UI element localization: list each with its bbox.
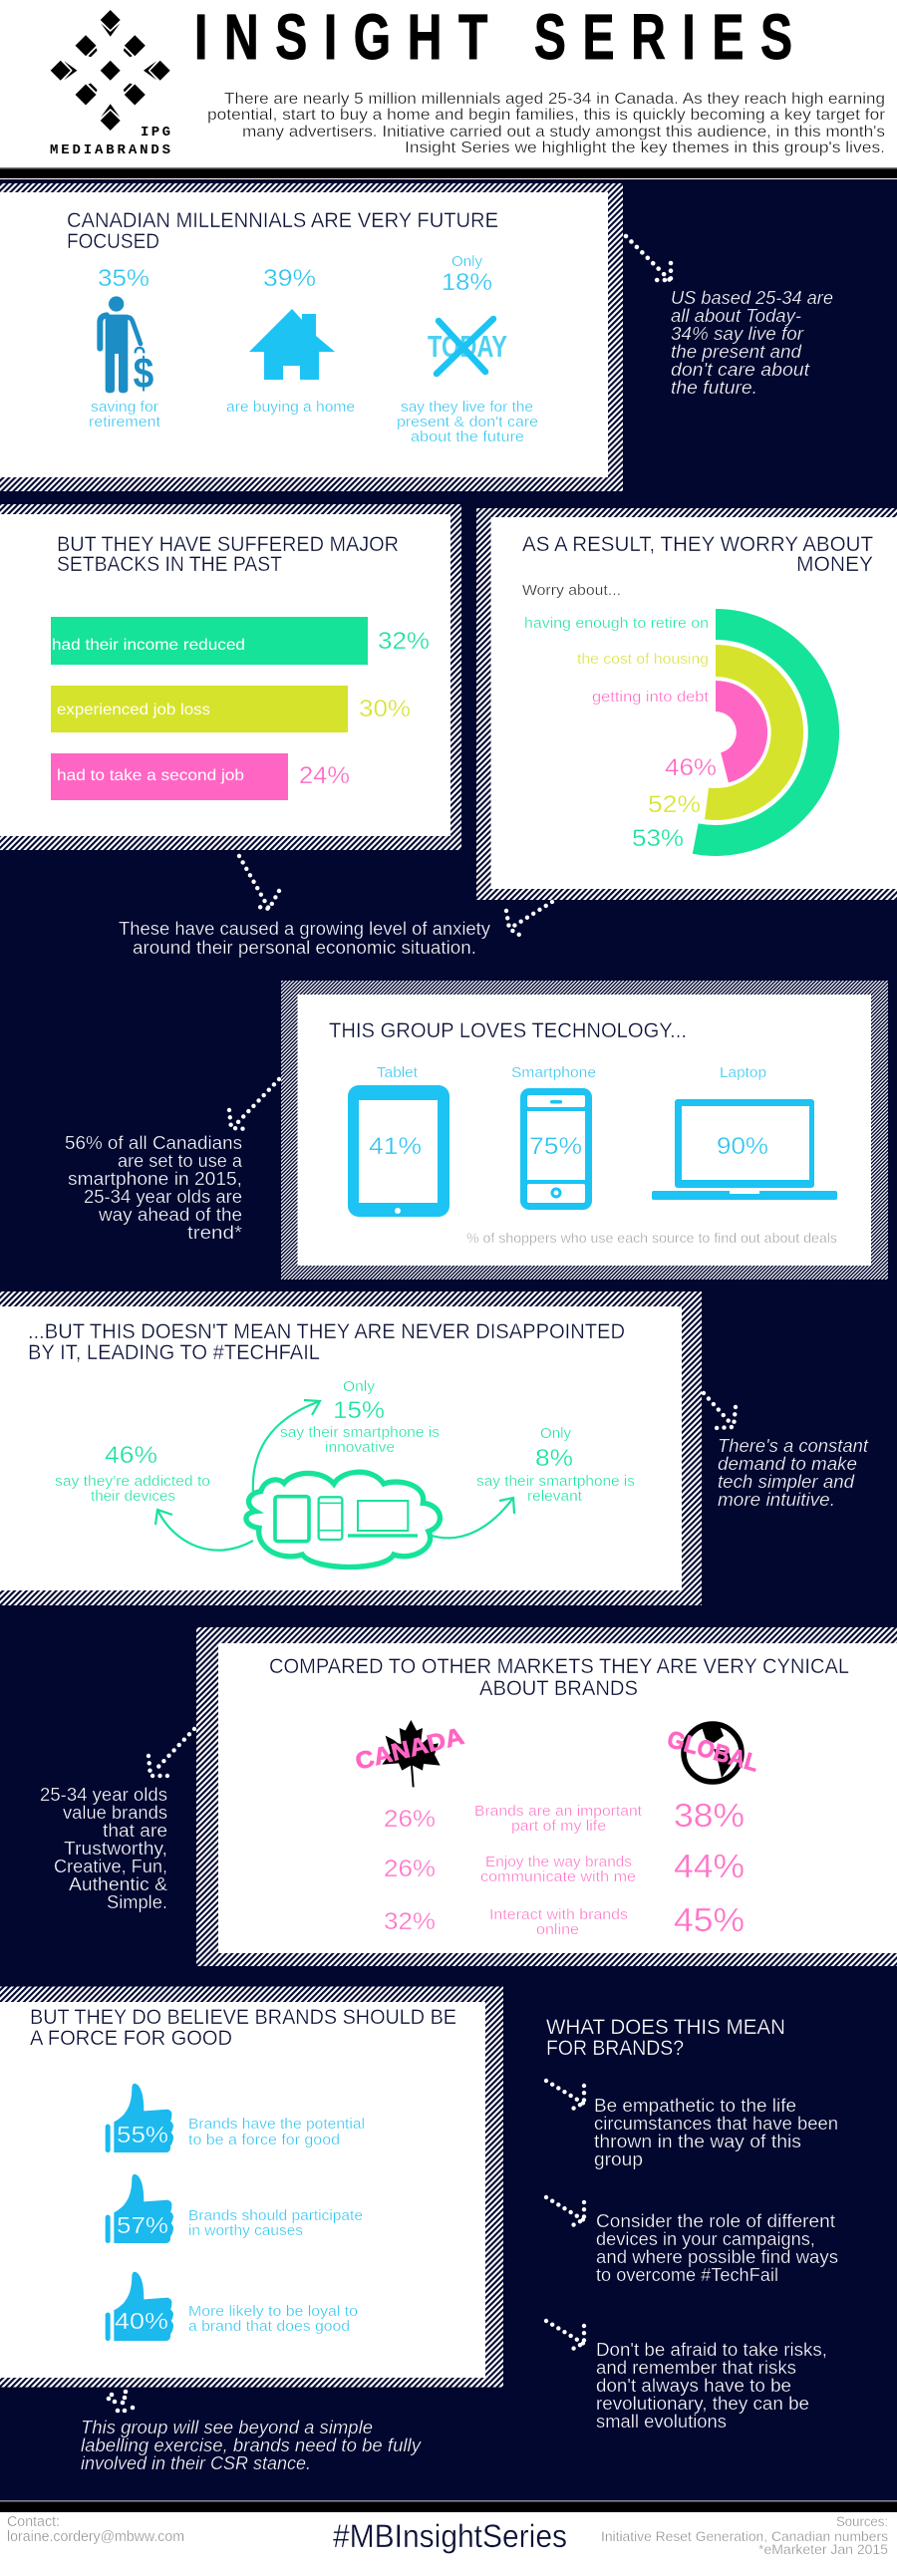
stat: only 15% innovative: [280, 1378, 440, 1456]
icon: person with dollar: $: [134, 351, 153, 399]
bar chart: setbacks: had to take a second job: [57, 767, 244, 784]
heading: techfail: [28, 1320, 625, 1364]
callout: smartphone use: smartphone in 2015,: [68, 1169, 242, 1189]
panel: loves technology: [281, 981, 888, 1280]
comparison table: Canada vs Global: part of my life: [511, 1818, 606, 1835]
intro paragraph: Insight Series we highlight the key themes in this group's lives.: [405, 140, 885, 156]
heading: techfail: BY IT, LEADING TO #TECHFAIL: [28, 1341, 320, 1364]
header: [0, 0, 897, 179]
stat: only 8% relevant: relevant: [527, 1488, 583, 1505]
callout: smartphone use: are set to use a: [118, 1151, 243, 1171]
heading: future focused: [67, 209, 498, 253]
contact: loraine.cordery@mbww.com: [7, 2528, 184, 2545]
heading: what does this mean: WHAT DOES THIS MEAN: [546, 2016, 785, 2039]
label: loyal: a brand that does good: [188, 2318, 350, 2335]
text: point 1: Be empathetic to the life: [594, 2096, 796, 2116]
callout: US based: 34% say live for: [671, 324, 804, 344]
heading: setbacks: [57, 533, 399, 576]
intro paragraph: potential, start to buy a home and begin families, this is quickly becoming a key target for: [207, 107, 886, 124]
comparison table: Canada vs Global: 44%: [674, 1848, 745, 1884]
stat: 46% addicted: their devices: [91, 1488, 175, 1505]
text: point 3: revolutionary, they can be: [596, 2394, 809, 2414]
text: point 2: devices in your campaigns,: [596, 2229, 815, 2249]
text: point 1: [594, 2096, 838, 2169]
bar chart: setbacks: 24%: [299, 762, 350, 789]
text: point 3: and remember that risks: [596, 2358, 796, 2378]
heading: worry about money: AS A RESULT, THEY WORRY ABOUT: [522, 533, 873, 556]
heading: what does this mean: [546, 2016, 785, 2060]
logo: IPG Mediabrands: IPG: [141, 125, 170, 141]
callout: brand values: value brands: [63, 1803, 167, 1823]
sources: Initiative Reset Generation, Canadian numbers: [601, 2528, 888, 2544]
callout: brand values: [40, 1785, 167, 1912]
label: worry about: Worry about...: [522, 582, 621, 599]
callout: simpler tech: demand to make: [718, 1454, 857, 1474]
stat: only 18% live for today: say they live for the: [401, 399, 533, 416]
icon: thumb 40%: [106, 2272, 173, 2341]
label: potential: [188, 2116, 365, 2148]
radial chart: worries: having enough to retire on: [524, 615, 709, 632]
icon: thumb 40%: 40%: [115, 2308, 168, 2334]
label: potential: Brands have the potential: [188, 2116, 365, 2133]
stat: only 15% innovative: innovative: [325, 1439, 395, 1456]
callout: US based: don't care about: [671, 360, 810, 380]
callout: anxiety: [119, 919, 490, 958]
callout: smartphone use: 25-34 year olds are: [84, 1187, 242, 1207]
icon: thumb 55%: 55%: [117, 2122, 168, 2147]
callout: simpler tech: tech simpler and: [718, 1472, 855, 1492]
text: point 3: [596, 2340, 827, 2432]
arrow: to tech callout: [704, 1393, 736, 1428]
panel: setbacks: [0, 504, 461, 850]
stat: only 18% live for today: about the future: [411, 429, 524, 445]
label: loyal: [188, 2303, 358, 2335]
radial chart: worries: the cost of housing: [577, 651, 709, 668]
icon: crossed out today: TODAY: [428, 329, 507, 364]
text: point 1: group: [594, 2149, 643, 2169]
stat: only 18% live for today: [397, 253, 538, 445]
comparison table: Canada vs Global: 26%: [384, 1856, 436, 1882]
device: tablet: Tablet: [377, 1064, 419, 1081]
comparison table: Canada vs Global: Enjoy the way brands: [485, 1854, 632, 1870]
arrow: to US callout: [626, 236, 671, 280]
bar chart: setbacks: [51, 617, 430, 800]
panel: techfail: [0, 1291, 702, 1605]
callout: US based: [671, 288, 833, 398]
stat: 46% addicted: 46%: [105, 1442, 157, 1469]
label: potential: to be a force for good: [188, 2132, 340, 2148]
callout: CSR stance: involved in their CSR stance.: [81, 2453, 311, 2473]
callout: US based: the future.: [671, 378, 757, 398]
radial chart: worries: 52%: [648, 791, 701, 818]
icon: person with dollar: [100, 296, 153, 399]
stat: only 15% innovative: 15%: [333, 1397, 385, 1424]
sources: [601, 2513, 888, 2557]
heading: setbacks: SETBACKS IN THE PAST: [57, 553, 282, 576]
callout: anxiety: These have caused a growing level of anxiety: [119, 919, 490, 939]
stat: only 18% live for today: Only: [451, 253, 483, 270]
heading: worry about money: MONEY: [796, 553, 873, 576]
arrow: point 2: [546, 2197, 584, 2227]
contact: [7, 2513, 184, 2545]
comparison table: Canada vs Global: online: [536, 1921, 579, 1938]
callout: CSR stance: This group will see beyond a simple: [81, 2418, 373, 2437]
stat: only 8% relevant: [476, 1425, 635, 1505]
radial chart: worries: [524, 609, 839, 856]
callout: anxiety: around their personal economic situation.: [133, 938, 476, 958]
label: worthy causes: in worthy causes: [188, 2222, 303, 2239]
arrow: small dotted head: [107, 2390, 135, 2413]
comparison table: Canada vs Global: [384, 1797, 745, 1938]
comparison table: Canada vs Global: 26%: [384, 1806, 436, 1833]
text: point 2: and where possible find ways: [596, 2247, 838, 2267]
bar chart: setbacks: 32%: [378, 628, 430, 655]
heading: force for good: A FORCE FOR GOOD: [30, 2027, 232, 2050]
device: laptop: [652, 1064, 837, 1200]
text: point 2: to overcome #TechFail: [596, 2265, 778, 2285]
icon: crossed out today: [428, 319, 507, 374]
heading: techfail: ...BUT THIS DOESN'T MEAN THEY ARE NEVER DISAPPOINTED: [28, 1320, 625, 1343]
logo: IPG Mediabrands: [50, 10, 170, 158]
text: point 3: Don't be afraid to take risks,: [596, 2340, 827, 2360]
arrows: from cloud: [155, 1400, 514, 1551]
stat: 39% buying a home: 39%: [263, 265, 316, 292]
text: point 2: Consider the role of different: [596, 2211, 835, 2231]
callout: brand values: Trustworthy,: [64, 1839, 167, 1859]
device: laptop: 90%: [717, 1133, 768, 1160]
device: laptop: Laptop: [720, 1064, 766, 1081]
stat: only 8% relevant: Only: [540, 1425, 572, 1442]
heading: force for good: [30, 2006, 456, 2050]
contact: Contact:: [7, 2513, 60, 2530]
label: worthy causes: Brands should participate: [188, 2207, 363, 2224]
label: loyal: More likely to be loyal to: [188, 2303, 358, 2320]
arrow: to values callout: [149, 1729, 194, 1776]
icon: house: [249, 309, 335, 380]
comparison table: Canada vs Global: Brands are an important: [474, 1803, 643, 1820]
callout: smartphone use: [65, 1133, 243, 1243]
comparison table: Canada vs Global: 45%: [674, 1901, 745, 1938]
callout: simpler tech: There's a constant: [718, 1436, 869, 1456]
device: smartphone: [511, 1064, 596, 1210]
callout: simpler tech: [718, 1436, 869, 1510]
callout: brand values: that are: [103, 1821, 167, 1841]
stat: 39% buying a home: [226, 265, 355, 416]
callout: smartphone use: 56% of all Canadians: [65, 1133, 242, 1153]
arrow: point 1: [546, 2081, 584, 2111]
hashtag: #MBInsightSeries: [333, 2518, 567, 2554]
callout: US based: all about Today-: [671, 306, 801, 326]
panel: cynical about brands: [196, 1627, 897, 1966]
heading: what does this mean: FOR BRANDS?: [546, 2037, 684, 2060]
comparison table: Canada vs Global: 32%: [384, 1908, 436, 1935]
heading: force for good: BUT THEY DO BELIEVE BRANDS SHOULD BE: [30, 2006, 456, 2029]
device: tablet: 41%: [369, 1133, 422, 1160]
bar chart: setbacks: had their income reduced: [52, 637, 245, 654]
callout: US based: the present and: [671, 342, 802, 362]
stat: only 8% relevant: 8%: [535, 1445, 573, 1472]
device: smartphone: 75%: [529, 1133, 582, 1160]
stat: 46% addicted: say they're addicted to: [55, 1473, 210, 1490]
radial chart: worries: getting into debt: [592, 689, 710, 706]
text: point 2: [596, 2211, 838, 2285]
callout: brand values: Authentic &: [69, 1874, 167, 1894]
callout: simpler tech: more intuitive.: [718, 1490, 835, 1510]
footer: [0, 2500, 897, 2576]
stat: 39% buying a home: are buying a home: [226, 399, 355, 416]
stat: only 8% relevant: say their smartphone is: [476, 1473, 635, 1490]
heading: worry about money: [522, 533, 873, 576]
callout: smartphone use: trend*: [187, 1223, 242, 1243]
stat: 35% saving for retirement: saving for: [91, 399, 158, 416]
callout: brand values: Creative, Fun,: [54, 1857, 167, 1876]
heading: future focused: CANADIAN MILLENNIALS ARE VERY FUTURE: [67, 209, 498, 232]
stat: 35% saving for retirement: [89, 265, 161, 430]
stat: only 15% innovative: Only: [343, 1378, 376, 1395]
stat: 35% saving for retirement: retirement: [89, 414, 161, 430]
comparison table: Canada vs Global: communicate with me: [480, 1868, 636, 1885]
arrow: to smartphone callout: [229, 1079, 279, 1129]
logo: IPG Mediabrands: MEDIABRANDS: [50, 143, 170, 158]
callout: brand values: 25-34 year olds: [40, 1785, 167, 1805]
callout: CSR stance: labelling exercise, brands need to be fully: [81, 2435, 422, 2455]
sources: *eMarketer Jan 2015: [758, 2541, 888, 2557]
text: point 3: small evolutions: [596, 2412, 727, 2432]
callout: US based: US based 25-34 are: [671, 288, 833, 308]
stat: only 15% innovative: say their smartphone is: [280, 1424, 440, 1441]
device: smartphone: Smartphone: [511, 1064, 596, 1081]
callout: CSR stance: [81, 2418, 422, 2473]
intro paragraph: There are nearly 5 million millennials aged 25-34 in Canada. As they reach high earning: [224, 91, 885, 108]
icon: globe with Global: GLOBAL: [664, 1726, 761, 1778]
heading: future focused: FOCUSED: [67, 230, 159, 253]
panel: force for good: [0, 1987, 503, 2388]
icon: thumb 55%: [106, 2084, 173, 2152]
stat: only 18% live for today: 18%: [442, 269, 492, 296]
caption: shoppers: % of shoppers who use each source to find out about deals: [466, 1230, 837, 1246]
bar chart: setbacks: 30%: [359, 696, 411, 722]
heading: cynical: [269, 1655, 849, 1700]
icon: thumb 57%: 57%: [117, 2212, 168, 2238]
radial chart: worries: 46%: [665, 754, 717, 781]
device: tablet: [348, 1064, 449, 1217]
stat: 46% addicted: [55, 1442, 210, 1505]
panel: worry about money: [476, 508, 897, 900]
intro paragraph: many advertisers. Initiative carried out a study amongst this audience, in this month's: [242, 124, 885, 141]
stat: 35% saving for retirement: 35%: [98, 265, 150, 292]
text: point 1: thrown in the way of this: [594, 2132, 801, 2151]
arrow: from setbacks: [239, 856, 279, 909]
radial chart: worries: 53%: [632, 825, 684, 852]
icon: cloud with devices: [246, 1472, 440, 1567]
arrow: from worry panel: [506, 902, 552, 935]
heading: loves technology: THIS GROUP LOVES TECHNOLOGY...: [329, 1019, 687, 1042]
comparison table: Canada vs Global: 38%: [674, 1797, 745, 1834]
icon: thumb 57%: [106, 2174, 173, 2243]
icon: maple leaf with Canada: CANADA: [353, 1723, 466, 1776]
heading: cynical: COMPARED TO OTHER MARKETS THEY ARE VERY CYNICAL: [269, 1655, 849, 1678]
sources: Sources:: [836, 2513, 888, 2529]
heading: cynical: ABOUT BRANDS: [479, 1677, 638, 1700]
arrow: point 3: [546, 2321, 584, 2351]
panel: future focused: [0, 183, 623, 491]
text: point 1: circumstances that have been: [594, 2114, 838, 2134]
comparison table: Canada vs Global: Interact with brands: [489, 1906, 628, 1923]
bar chart: setbacks: experienced job loss: [57, 702, 210, 718]
text: point 3: don't always have to be: [596, 2376, 791, 2396]
stat: only 18% live for today: present & don't care: [397, 414, 538, 430]
title: INSIGHT SERIES: [194, 1, 792, 73]
label: worthy causes: [188, 2207, 363, 2239]
heading: setbacks: BUT THEY HAVE SUFFERED MAJOR: [57, 533, 399, 556]
callout: brand values: Simple.: [107, 1892, 167, 1912]
callout: smartphone use: way ahead of the: [98, 1205, 242, 1225]
intro paragraph: [207, 91, 886, 156]
